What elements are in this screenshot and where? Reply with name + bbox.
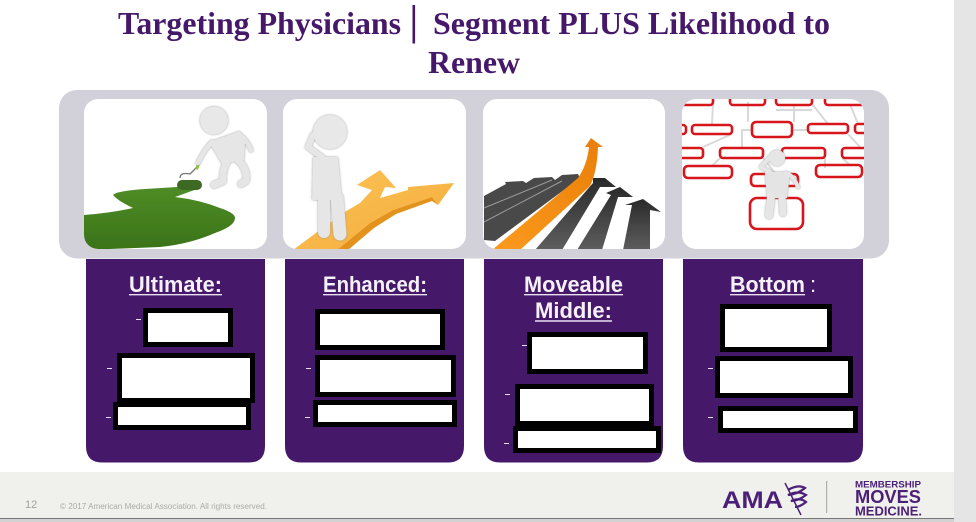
panel: Enhanced [285,259,464,462]
logo: AMA: AMA [722,487,783,514]
image: figure before a red flowchart [682,99,864,249]
title [118,5,830,80]
panel: Bottom: Bottom [730,272,805,297]
logo divider [826,481,827,513]
image: figure painting a grass road [84,99,267,250]
title: Targeting Physicians [118,5,401,41]
panel: Bottom [683,259,863,462]
title: Segment PLUS Likelihood to [433,5,830,41]
panel: Bottom: : [810,272,816,297]
logo: Membership Moves Medicine [855,480,922,518]
panel: Moveable Middle: Middle: [535,298,612,323]
logo: Membership Moves Medicine: MOVES [855,487,921,507]
panel: Enhanced: Enhanced: [323,272,427,297]
image: figure at a forked arrow [283,99,466,250]
panel: Moveable Middle [484,259,663,462]
footer bar [0,472,954,522]
logo: Membership Moves Medicine: MEDICINE. [855,504,922,518]
logo: AMA [722,483,806,515]
panel: image band [59,90,889,258]
panel: Ultimate: Ultimate: [129,272,222,297]
copyright: © 2017 American Medical Association. All rights reserved. [60,502,267,511]
title: Renew [428,44,520,80]
right margin strip [954,0,976,522]
logo: Membership Moves Medicine: MEMBERSHIP [855,480,922,490]
page number: 12 [25,499,37,511]
panel: Moveable Middle: Moveable [524,272,623,297]
image: orange arrow rising above dark arrows [483,99,665,250]
panel: Ultimate [86,259,265,462]
